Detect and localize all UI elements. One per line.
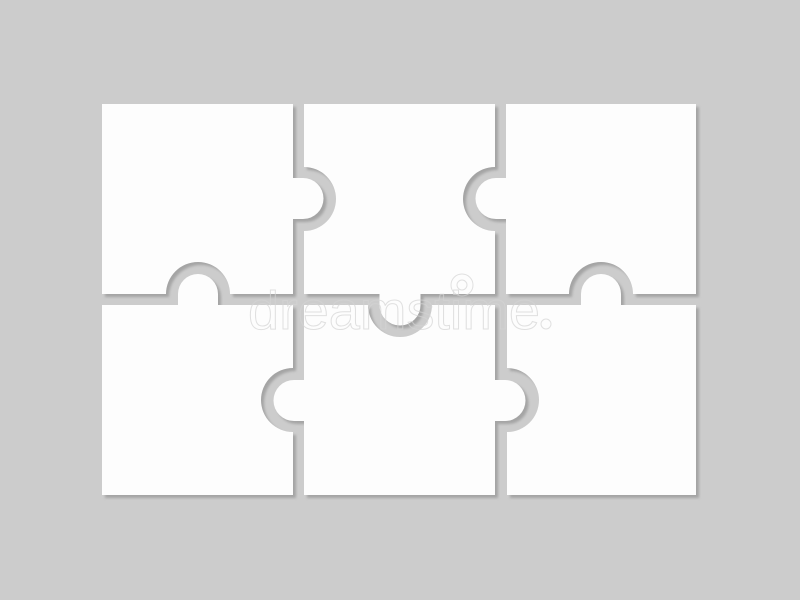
- piece shadows: [105, 107, 699, 498]
- piece: top middle: [304, 104, 495, 325]
- piece: top right: [476, 104, 696, 294]
- watermark: dreamstime: [248, 281, 540, 341]
- piece: bottom right: [507, 274, 696, 495]
- piece: bottom left: [102, 274, 293, 495]
- piece: bottom middle: [274, 305, 526, 495]
- piece: top left: [102, 104, 324, 294]
